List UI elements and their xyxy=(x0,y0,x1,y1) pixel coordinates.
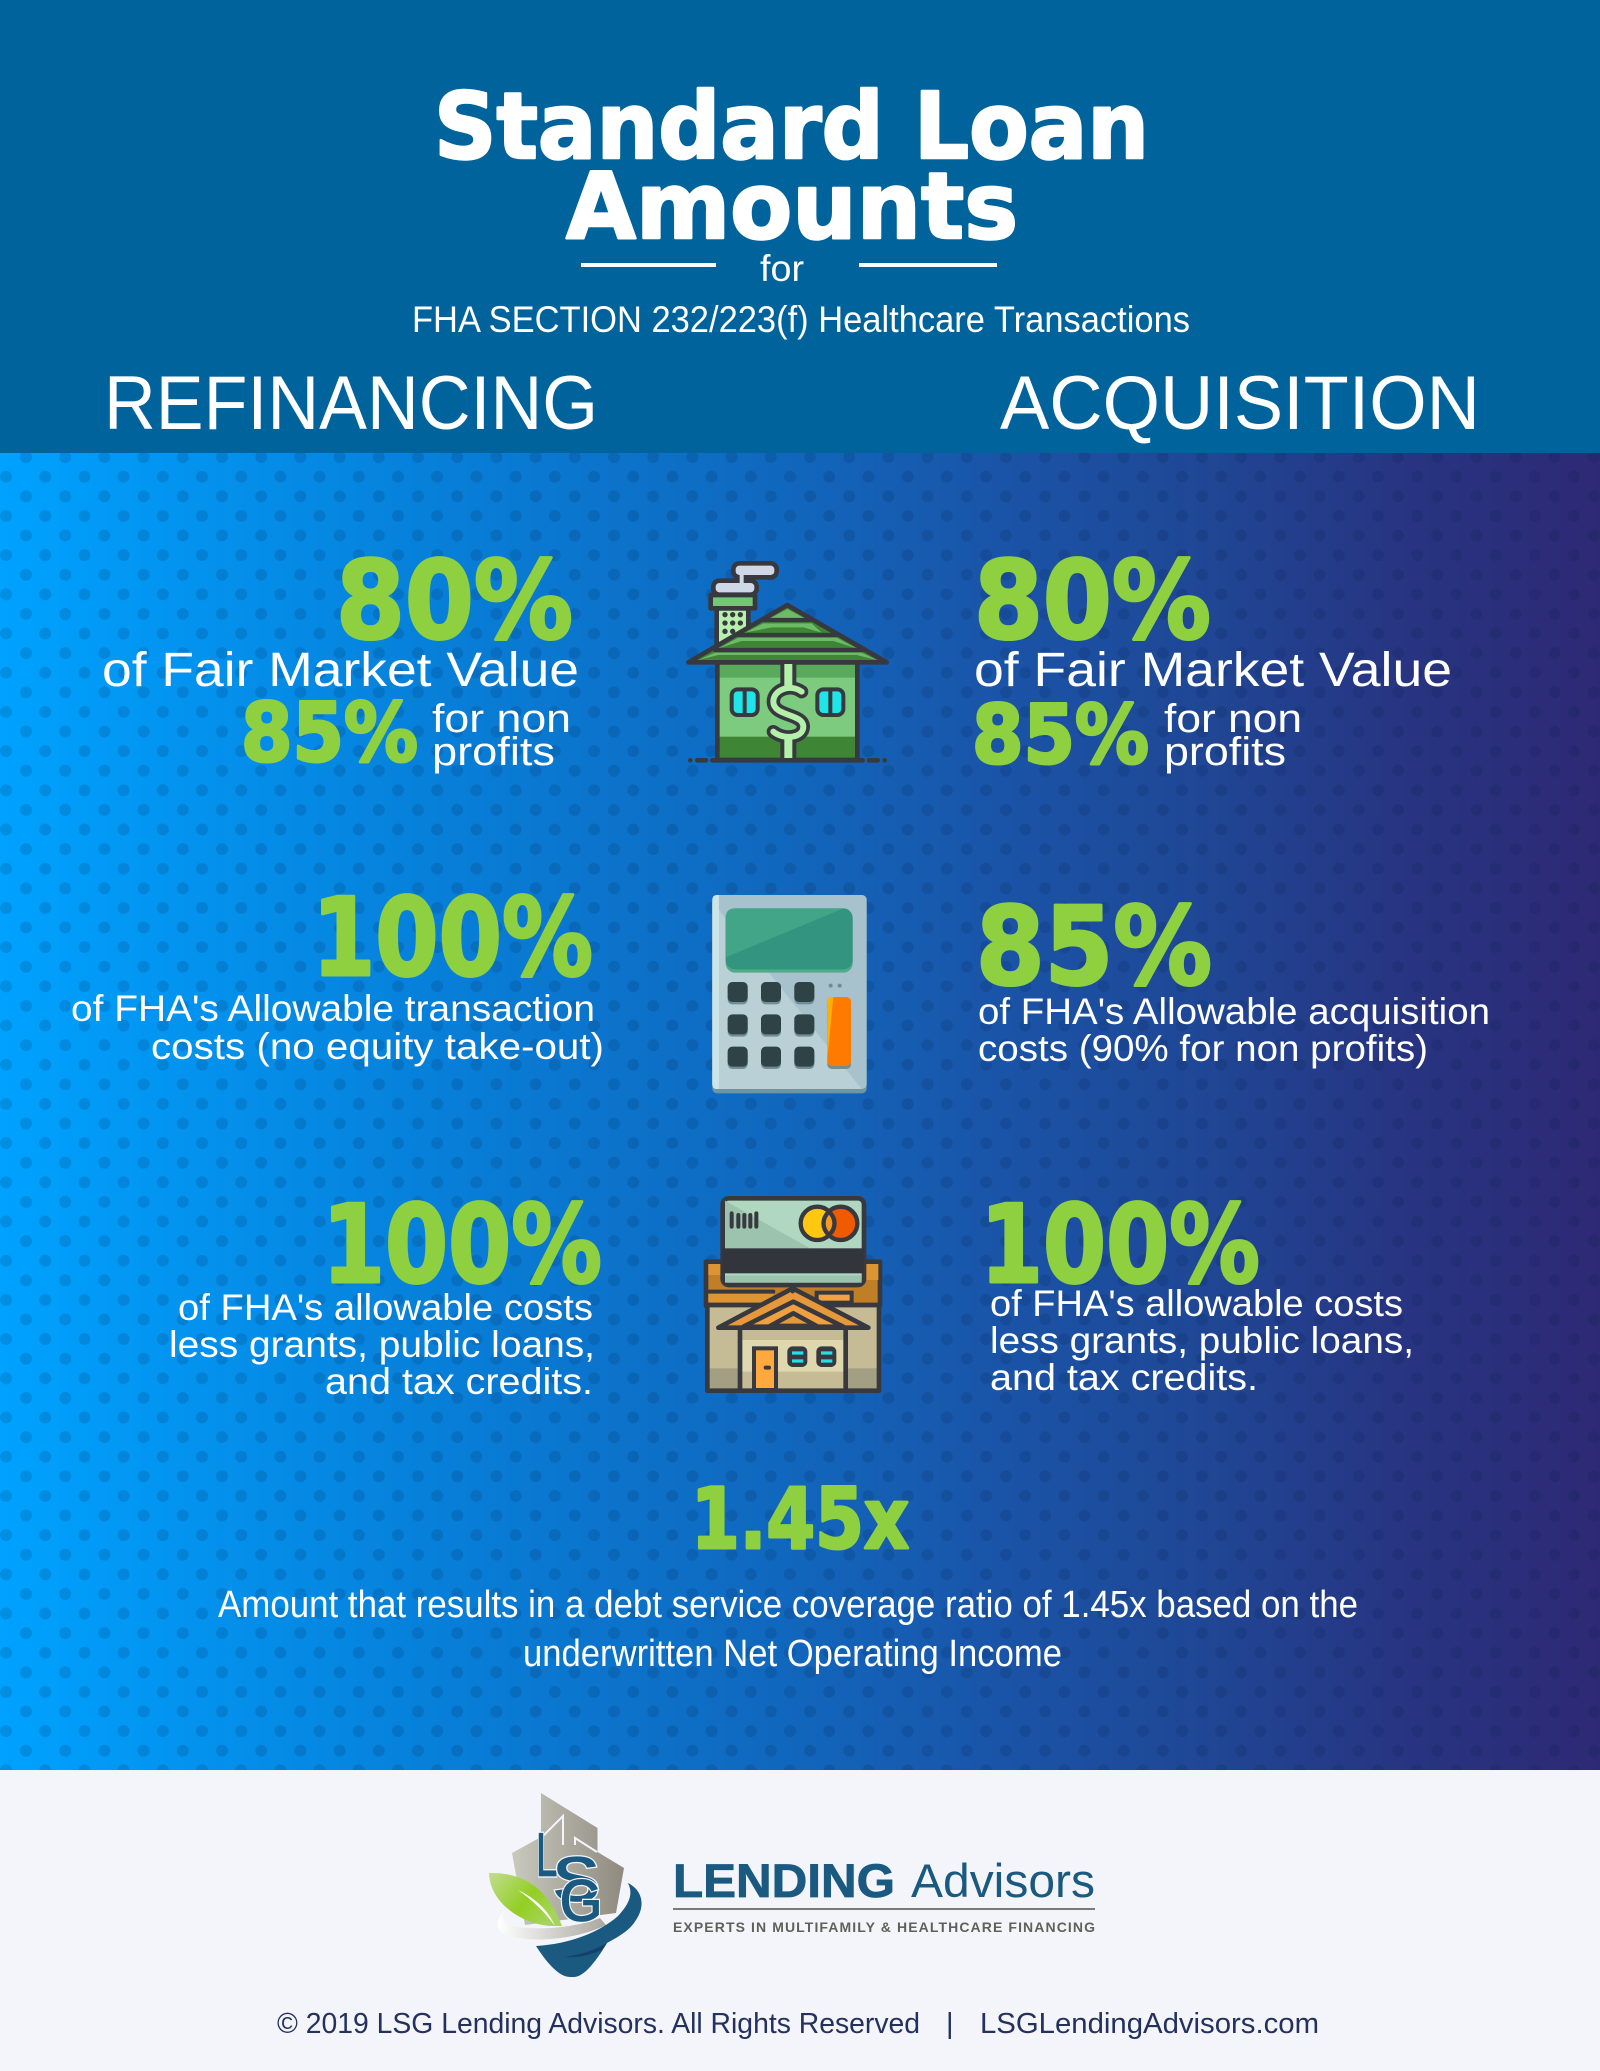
label allowable costs: of FHA's allowable costs xyxy=(178,1287,593,1328)
label allowable costs: of FHA's allowable costs xyxy=(990,1283,1403,1324)
label allowable costs xyxy=(990,1283,1414,1398)
label for non profits: for non xyxy=(432,697,571,741)
logo wordmark: Advisors xyxy=(911,1854,1095,1907)
panel: row 3 acquisition xyxy=(980,1183,1414,1398)
label acquisition costs xyxy=(978,991,1490,1069)
stat 85%: 85% xyxy=(972,689,1149,783)
panel: row 2 refinancing xyxy=(71,876,604,1067)
stat 85%: 85% xyxy=(241,687,418,781)
panel: footer xyxy=(0,1770,1600,2071)
description xyxy=(218,1584,1358,1675)
subtitle: FHA section: FHA SECTION 232/223(f) Healthcare Transactions xyxy=(412,299,1190,340)
logo wordmark: LENDING xyxy=(673,1854,895,1907)
panel: debt service coverage xyxy=(218,1470,1358,1675)
copyright line xyxy=(277,2008,1319,2040)
panel: row 1 refinancing xyxy=(102,539,579,781)
copyright line: LSGLendingAdvisors.com xyxy=(980,2008,1319,2040)
stat 80%: 80% xyxy=(974,539,1211,664)
logo mark: LSG shield: G xyxy=(559,1867,603,1936)
subtitle: for, with rules: for xyxy=(760,248,804,289)
label for non profits xyxy=(1164,697,1302,774)
icon: house with dollar sign xyxy=(688,563,887,760)
label allowable costs: and tax credits. xyxy=(990,1357,1258,1398)
subtitle: for, with rules xyxy=(581,248,997,289)
copyright line: | xyxy=(946,2008,954,2040)
label allowable costs: and tax credits. xyxy=(325,1361,593,1402)
logo wordmark xyxy=(673,1854,1095,1935)
stat 85%: 85% xyxy=(976,885,1212,1010)
panel: header band xyxy=(0,0,1600,454)
panel: row 1 acquisition xyxy=(972,539,1452,783)
label allowable costs: less grants, public loans, xyxy=(169,1324,595,1365)
panel: gradient dotted body xyxy=(0,453,1600,1770)
copyright line: © 2019 LSG Lending Advisors. All Rights Reserved xyxy=(277,2008,920,2040)
stat 1.45x: 1.45x xyxy=(691,1470,909,1568)
label acquisition costs: of FHA's Allowable acquisition xyxy=(978,991,1490,1032)
label transaction costs xyxy=(71,988,604,1067)
heading: refinancing: REFINANCING xyxy=(104,361,598,446)
icon: calculator xyxy=(712,895,867,1093)
label transaction costs: of FHA's Allowable transaction xyxy=(71,988,595,1029)
label allowable costs xyxy=(169,1287,595,1402)
description: Amount that results in a debt service coverage ratio of 1.45x based on the xyxy=(218,1584,1358,1626)
title line 2: Amounts xyxy=(566,153,1018,260)
logo wordmark: EXPERTS IN MULTIFAMILY & HEALTHCARE FINANCING xyxy=(673,1919,1095,1935)
stat 100%: 100% xyxy=(322,1183,602,1308)
icon: credit card and house xyxy=(706,1198,880,1391)
logo mark: LSG shield: S xyxy=(552,1842,601,1916)
panel: row 3 refinancing xyxy=(169,1183,602,1402)
logo mark: LSG shield xyxy=(489,1793,642,1977)
label acquisition costs: costs (90% for non profits) xyxy=(978,1028,1428,1069)
stat 100%: 100% xyxy=(312,876,593,1001)
label fair market value: of Fair Market Value xyxy=(974,644,1452,697)
label for non profits: profits xyxy=(1164,730,1286,774)
label allowable costs: less grants, public loans, xyxy=(990,1320,1414,1361)
stat 100%: 100% xyxy=(980,1183,1260,1308)
label for non profits xyxy=(432,697,571,774)
label transaction costs: costs (no equity take-out) xyxy=(151,1026,604,1067)
label fair market value: of Fair Market Value xyxy=(102,644,579,697)
heading: acquisition: ACQUISITION xyxy=(1000,361,1480,446)
label for non profits: profits xyxy=(432,730,555,774)
description: underwritten Net Operating Income xyxy=(523,1633,1062,1675)
title line 1: Standard Loan xyxy=(434,73,1149,180)
panel: row 2 acquisition xyxy=(976,885,1490,1069)
logo mark: LSG shield: L xyxy=(536,1818,558,1891)
stat 80%: 80% xyxy=(336,539,573,664)
label for non profits: for non xyxy=(1164,697,1302,741)
